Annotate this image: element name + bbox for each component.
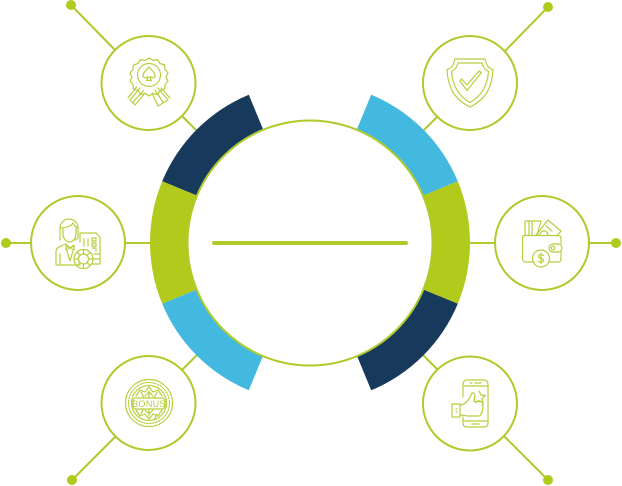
icon: shield with check bbox=[447, 59, 493, 107]
connector: bottom right bbox=[423, 355, 553, 485]
icon: phone with thumbs up bbox=[452, 380, 488, 427]
connector: left bbox=[1, 238, 151, 248]
badge: wallet bbox=[495, 196, 589, 290]
ring segment: blue upper right bbox=[357, 95, 458, 195]
ring segment: green left bbox=[150, 181, 196, 304]
center divider bar bbox=[212, 241, 408, 245]
badge: bonus bbox=[102, 356, 196, 450]
ring segment: blue lower left bbox=[162, 290, 263, 390]
badge: shield bbox=[423, 36, 517, 130]
connector: bottom left bbox=[67, 355, 197, 485]
bonus label: BONUS bbox=[132, 399, 166, 409]
icon: wallet with coin bbox=[522, 220, 562, 267]
icon: medal with spade bbox=[128, 58, 170, 106]
badge: dealer bbox=[31, 196, 125, 290]
center circle bbox=[188, 120, 432, 366]
ring segment: navy upper left bbox=[162, 95, 263, 195]
icon: casino dealer with chip bbox=[56, 219, 100, 268]
ring segment: navy lower right bbox=[357, 290, 458, 390]
connector: top right bbox=[423, 2, 553, 131]
connector: right bbox=[469, 238, 621, 248]
badge: mobile rating bbox=[423, 356, 517, 450]
connector: top left bbox=[66, 0, 197, 131]
badge: medal bbox=[102, 36, 196, 130]
ring segment: green right bbox=[424, 181, 470, 304]
